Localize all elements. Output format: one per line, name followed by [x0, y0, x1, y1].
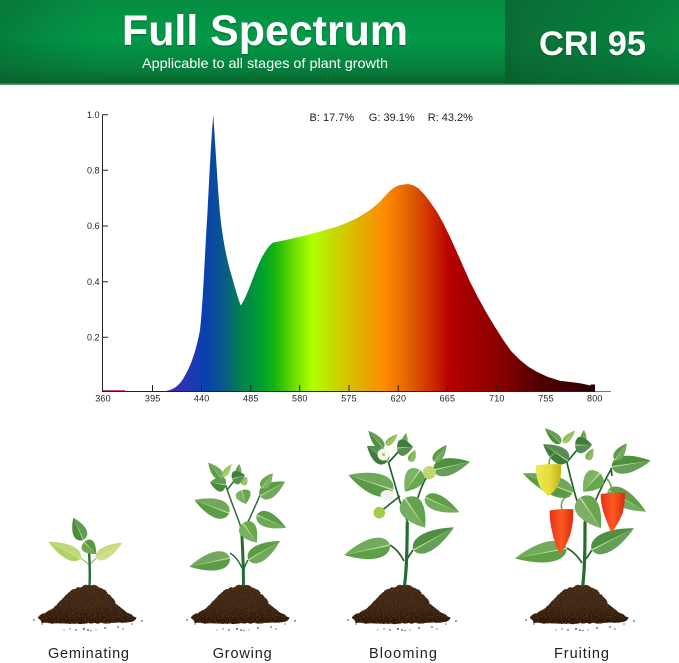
branches: [567, 450, 612, 563]
plant: growing: [186, 460, 296, 662]
y axis labels: 0.4: [87, 277, 100, 287]
soil mound: [347, 585, 457, 631]
y axis labels: 0.2: [87, 332, 100, 342]
soil mound: [33, 585, 143, 631]
y axis labels: [87, 110, 100, 342]
x axis labels: 800: [587, 394, 603, 404]
spectrum percentages: G: 39.1%: [369, 112, 415, 124]
x axis labels: [95, 394, 603, 404]
spectrum chart: [87, 110, 611, 404]
spectrum percentages: R: 43.2%: [428, 112, 473, 124]
spectrum curve: [163, 115, 595, 392]
spectrum percentages: B: 17.7%: [310, 112, 354, 124]
low-end trace: [103, 390, 125, 392]
label: Growing: [213, 646, 272, 662]
branches: [380, 450, 427, 561]
x axis labels: 395: [145, 394, 161, 404]
pepper stems: [549, 452, 612, 510]
plant: fruiting: [513, 425, 652, 662]
stem: [404, 522, 407, 589]
y axis labels: 0.8: [87, 165, 100, 175]
axes and ticks: [102, 115, 611, 391]
label: Blooming: [369, 646, 437, 662]
plant: blooming: [342, 428, 472, 662]
petioles: [80, 558, 97, 564]
x axis labels: 620: [391, 394, 406, 404]
header banner: [0, 0, 679, 85]
x axis labels: 710: [489, 394, 505, 404]
title: Full Spectrum: [122, 7, 408, 55]
soil mound: [525, 585, 635, 631]
x axis labels: 440: [194, 394, 210, 404]
x axis labels: 360: [95, 394, 111, 404]
stem: [242, 530, 243, 589]
red pepper left: [550, 509, 573, 554]
label: Geminating: [48, 646, 129, 662]
leaves: [187, 460, 289, 576]
x axis labels: 665: [440, 394, 455, 404]
subtitle: Applicable to all stages of plant growth: [142, 55, 388, 71]
leaves: [342, 428, 472, 565]
x axis labels: 575: [341, 394, 357, 404]
y axis labels: 1.0: [87, 110, 100, 120]
x axis labels: 755: [538, 394, 554, 404]
yellow pepper: [536, 464, 561, 496]
spectrum percentages: [310, 112, 473, 124]
flowers and buds: [374, 448, 436, 518]
label: Fruiting: [554, 646, 609, 662]
leaves: [513, 425, 652, 568]
stem: [582, 522, 585, 589]
CRI value: CRI 95: [539, 25, 646, 63]
branches: [222, 476, 260, 569]
leaves: [45, 515, 125, 565]
x axis labels: 580: [292, 394, 308, 404]
CRI panel: [505, 0, 679, 84]
x axis labels: 485: [243, 394, 259, 404]
soil mound: [186, 585, 296, 631]
plant: geminating: [33, 515, 143, 662]
red pepper right: [601, 493, 625, 533]
stem: [88, 550, 91, 589]
y axis labels: 0.6: [87, 221, 100, 231]
